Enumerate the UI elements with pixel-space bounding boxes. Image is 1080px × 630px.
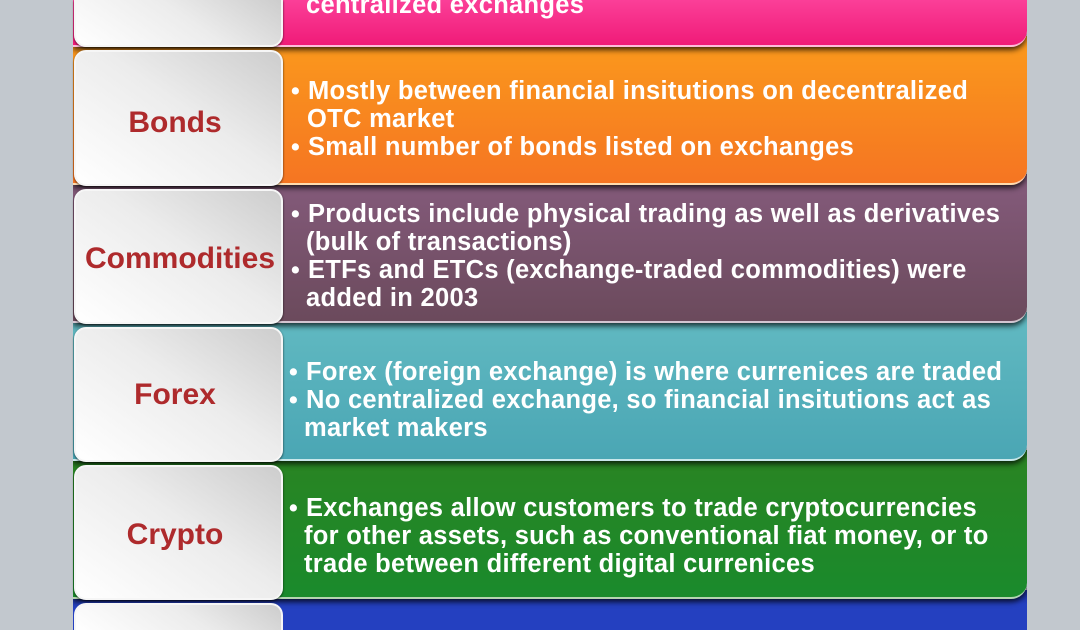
card: Commodities: Commodities bbox=[85, 242, 275, 275]
text: crypto description: for other assets, such as conventional fiat money, or to bbox=[304, 522, 989, 550]
card: Forex: Forex bbox=[134, 378, 216, 411]
text: forex description: No centralized exchange, so financial insitutions act as bbox=[306, 386, 991, 414]
card: bottom blank bbox=[74, 603, 283, 630]
text: commodities description: Products include physical trading as well as derivatives bbox=[308, 200, 1000, 228]
panel: pink band bbox=[73, 0, 1027, 47]
text: forex description bbox=[289, 358, 1002, 442]
text: crypto description: Exchanges allow customers to trade cryptocurrencies bbox=[306, 494, 977, 522]
text: crypto description bbox=[289, 494, 989, 578]
text: bonds description bbox=[291, 77, 968, 161]
text: bonds description: Small number of bonds listed on exchanges bbox=[308, 133, 854, 161]
text: commodities description: ETFs and ETCs (exchange-traded commodities) were bbox=[308, 256, 967, 284]
text: • bbox=[291, 256, 300, 284]
text: • bbox=[291, 77, 300, 105]
text: • bbox=[291, 200, 300, 228]
panel: blue band bbox=[73, 590, 1027, 630]
text: commodities description bbox=[291, 200, 1000, 312]
panel: orange band bbox=[73, 36, 1027, 185]
panel: purple band bbox=[73, 174, 1027, 323]
panel: teal band bbox=[73, 312, 1027, 461]
text: • bbox=[289, 358, 298, 386]
text: forex description: market makers bbox=[304, 414, 488, 442]
text: commodities description: (bulk of transactions) bbox=[306, 228, 572, 256]
card: stocks bbox=[74, 0, 283, 47]
text: crypto description: trade between different digital currenices bbox=[304, 550, 815, 578]
card: Crypto: Crypto bbox=[127, 518, 223, 551]
text: forex description: Forex (foreign exchange) is where currenices are traded bbox=[306, 358, 1002, 386]
text: bonds description: OTC market bbox=[307, 105, 454, 133]
card: Forex bbox=[74, 327, 283, 462]
text: • bbox=[289, 386, 298, 414]
panel: green band bbox=[73, 450, 1027, 599]
text: bonds description: Mostly between financial insitutions on decentralized bbox=[308, 77, 968, 105]
text: • bbox=[291, 133, 300, 161]
card: Crypto bbox=[74, 465, 283, 600]
card: Bonds bbox=[74, 50, 283, 186]
card: Commodities bbox=[74, 189, 283, 324]
text: commodities description: added in 2003 bbox=[306, 284, 478, 312]
card: Bonds: Bonds bbox=[128, 106, 222, 139]
text: • bbox=[289, 494, 298, 522]
